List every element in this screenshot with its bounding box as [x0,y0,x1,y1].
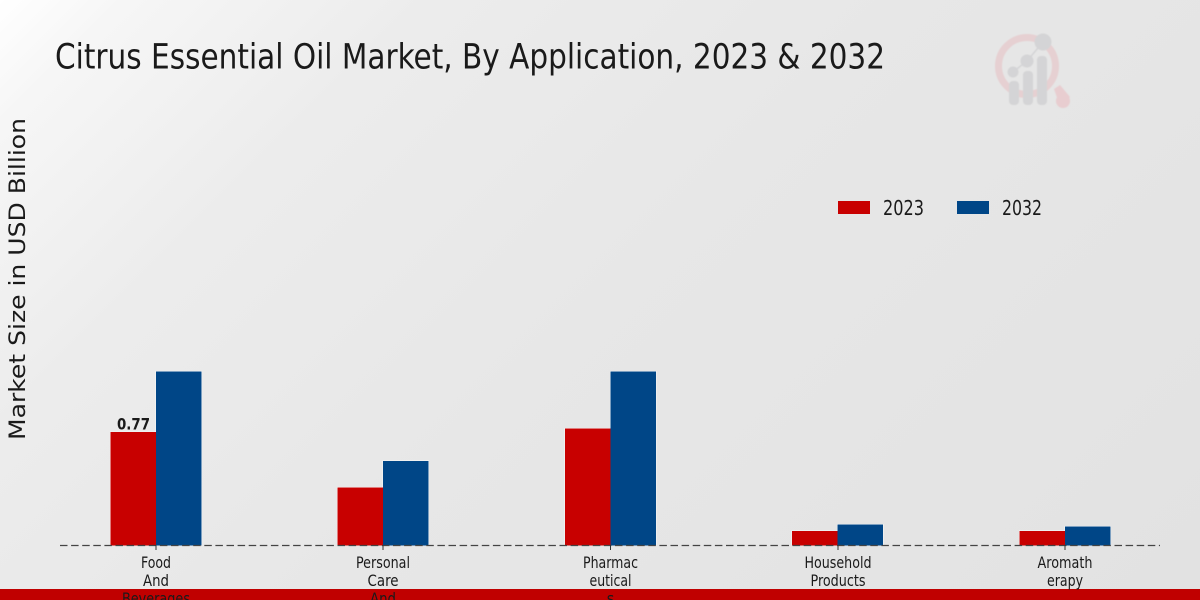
category label: Household Products: Household [804,553,872,572]
footer bar [0,589,1200,600]
category label: Personal Care And [356,553,410,600]
bar chart [60,371,1160,550]
bars: Personal Care [337,460,429,546]
category label: Food And Beverages: Food [141,553,171,572]
category label: Aromatherapy [1038,553,1092,590]
bars: Household Products [792,524,884,546]
bars: Pharmaceuticals [564,371,656,546]
bars: Food And Beverages [110,371,202,546]
category label: Personal Care And: Care [368,571,399,590]
category label: Pharmaceuticals: eutical [590,571,632,590]
category label: Food And Beverages [122,553,190,600]
category label: Household Products [804,553,872,590]
title: Citrus Essential Oil Market, By Application, 2023 & 2032 [55,38,885,78]
category label: Household Products: Products [810,571,866,590]
y axis label: Market Size in USD Billion [5,118,31,440]
category label: Food And Beverages: And [143,571,169,590]
value label: 0.77 [117,414,150,434]
bars: Aromatherapy [1019,526,1111,546]
legend: 2032 [1002,196,1042,220]
icon: watermark logo [998,34,1070,108]
category label: Personal Care And: Personal [356,553,410,572]
category label: Aromatherapy: Aromath [1038,553,1092,572]
category label: Pharmaceuticals [583,553,638,600]
category label: Pharmaceuticals: Pharmac [583,553,638,572]
legend: 2023 [883,196,924,220]
category label: Aromatherapy: erapy [1047,571,1083,590]
legend [838,196,1042,220]
